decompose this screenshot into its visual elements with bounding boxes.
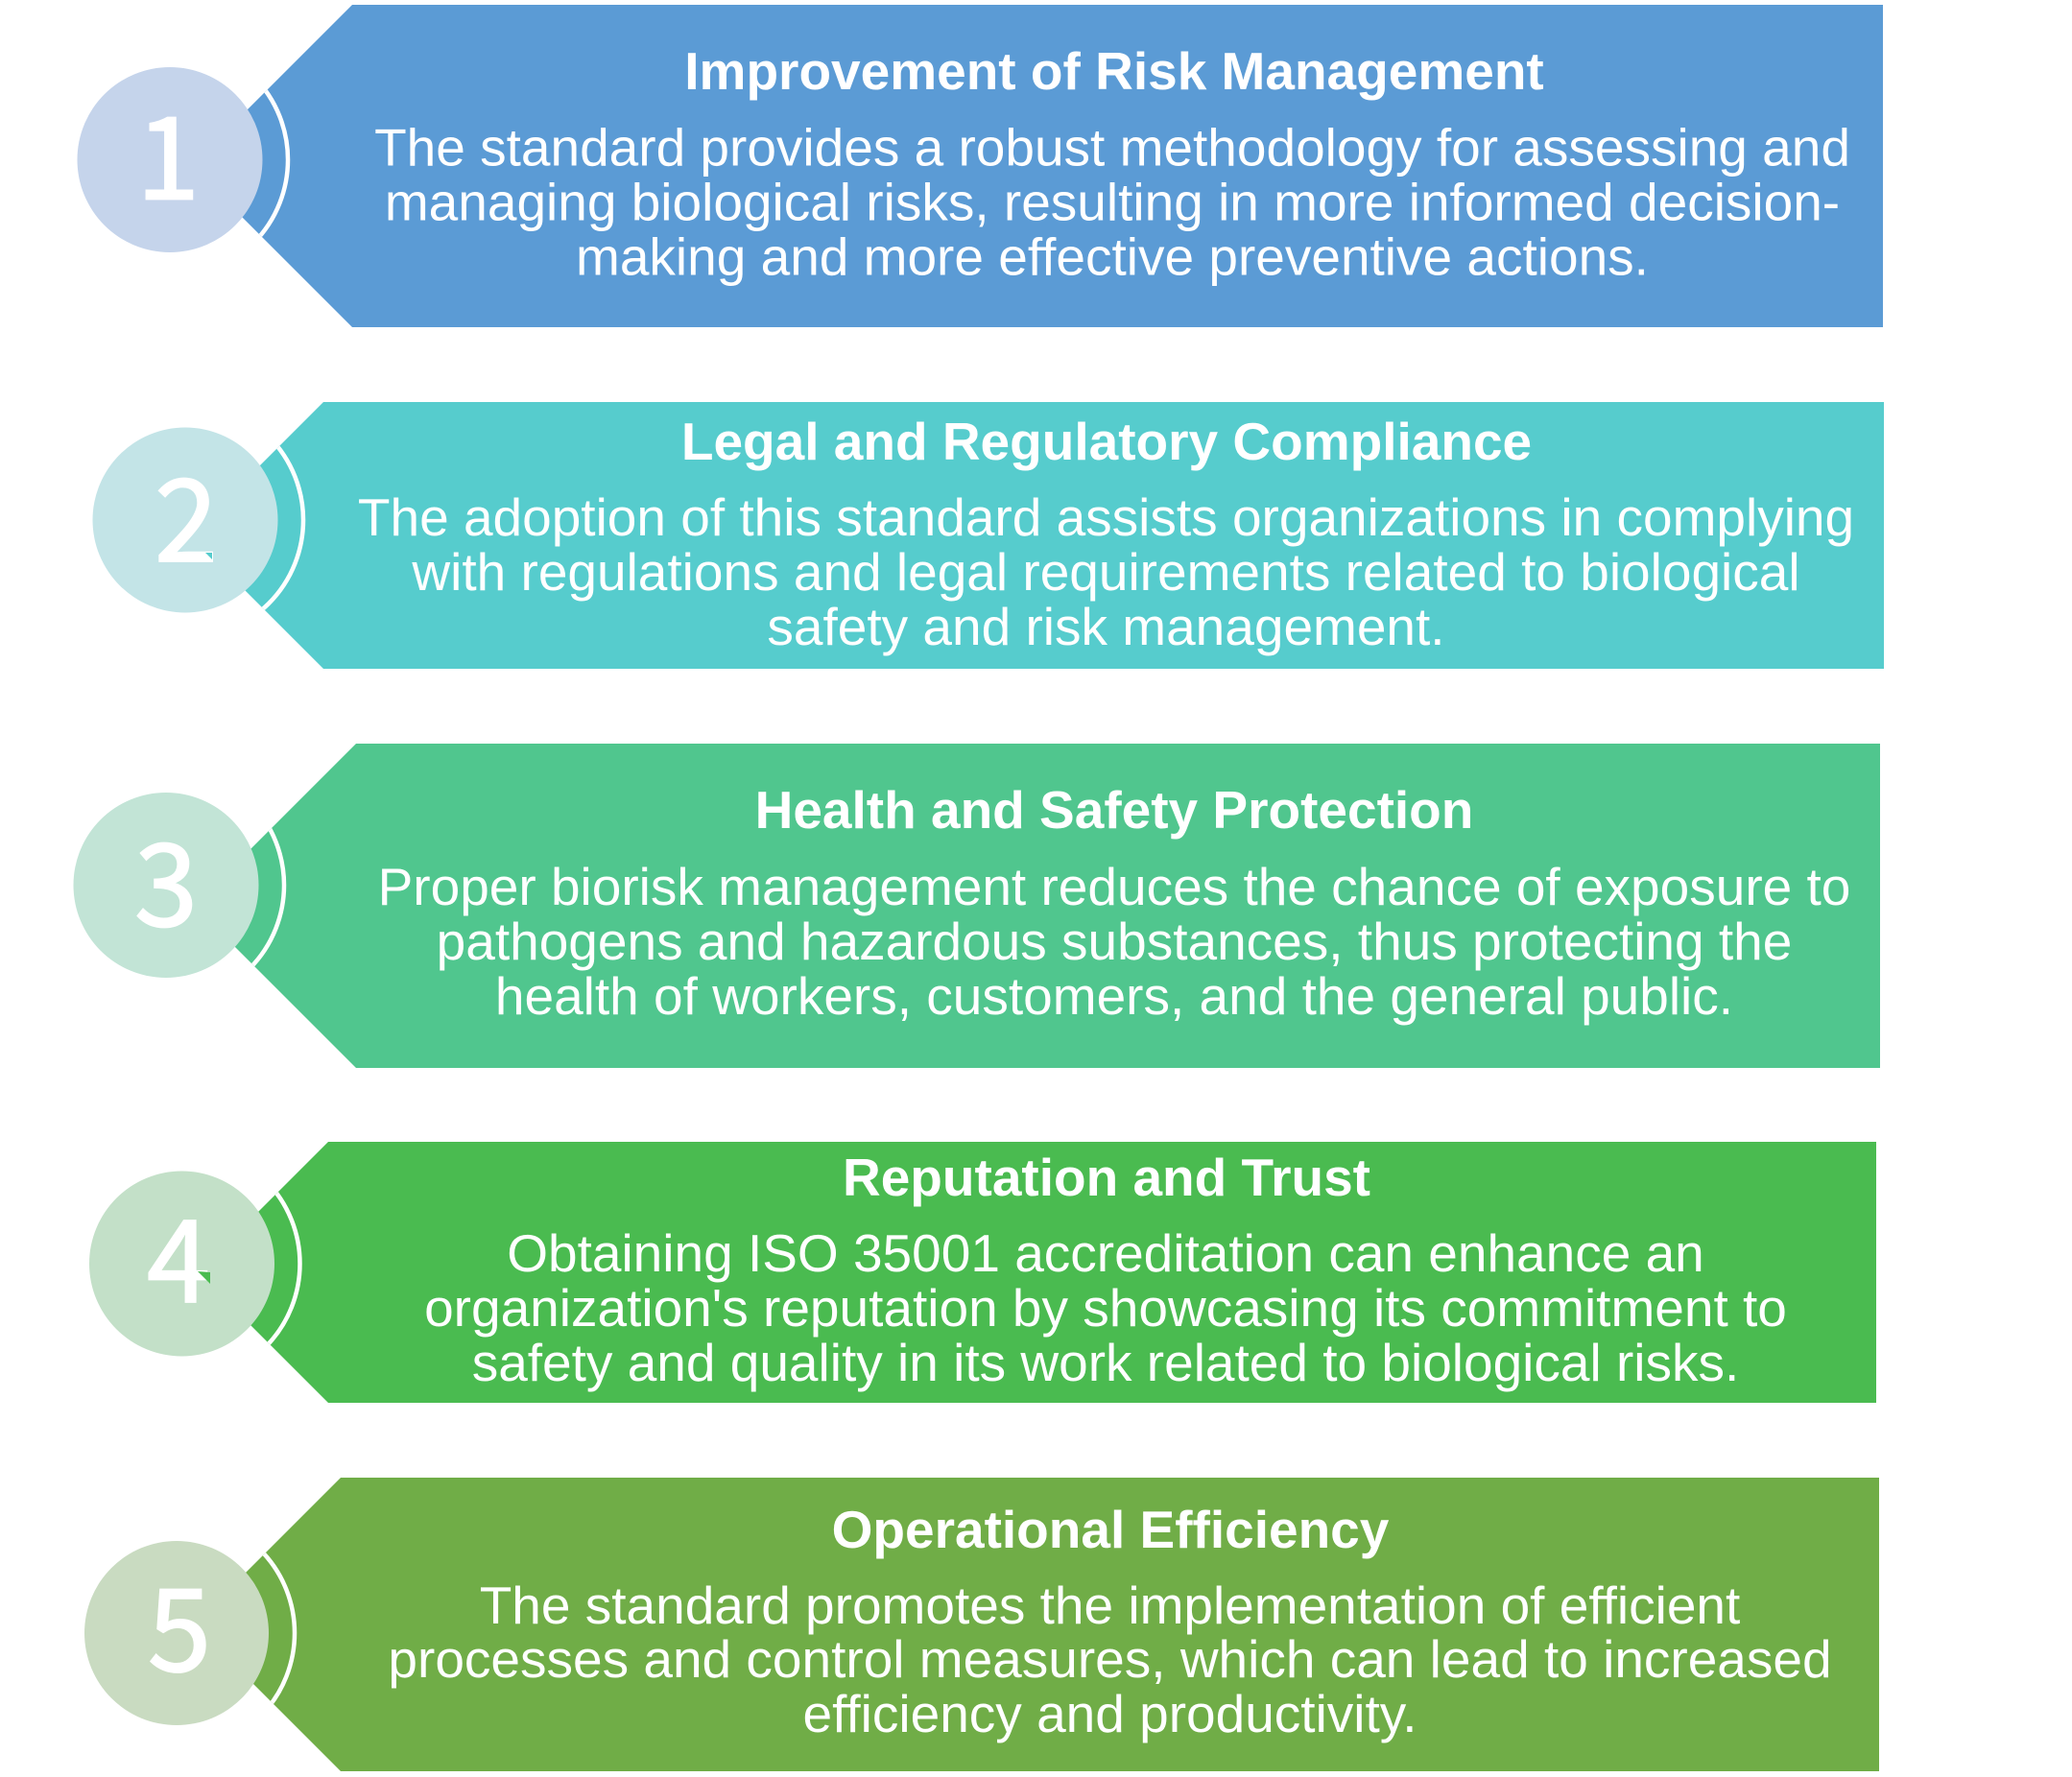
panel 2 white arc — [261, 445, 305, 610]
panel 1 heading: Improvement of Risk Management — [684, 41, 1544, 101]
panel 3 body text: Proper biorisk management reduces the chance of exposure to — [378, 857, 1850, 916]
panel 3 body text: health of workers, customers, and the general public. — [495, 966, 1733, 1026]
panel 5 heading: Operational Efficiency — [832, 1500, 1390, 1559]
panel 3 white arc — [251, 828, 286, 967]
panel 3 background arrow — [194, 744, 1880, 1068]
panel 2 body text: with regulations and legal requirements related to biological — [411, 542, 1800, 602]
panel 5 body text: efficiency and productivity. — [803, 1684, 1417, 1743]
panel 2 body text: The adoption of this standard assists organizations in complying — [358, 487, 1854, 547]
panel 4: Reputation and Trust — [63, 1142, 1876, 1403]
panel 5 number badge: 5 — [148, 1539, 211, 1704]
panel 4 body text: organization's reputation by showcasing its commitment to — [424, 1278, 1787, 1338]
panel 1 number badge — [77, 67, 263, 252]
panel 5: Operational Efficiency — [59, 1478, 1879, 1771]
panel 3 body text — [378, 857, 1850, 1026]
panel 1 body text: managing biological risks, resulting in more informed decision- — [385, 173, 1840, 232]
panel 5 number badge — [84, 1539, 269, 1725]
panel 1 background arrow — [191, 5, 1883, 327]
panel 5 background arrow — [194, 1478, 1879, 1771]
panel 3 body text: pathogens and hazardous substances, thus protecting the — [437, 912, 1792, 971]
panel 2 number badge: 2 — [155, 430, 218, 595]
panel 5 body text — [388, 1576, 1832, 1743]
panel 2 number badge — [92, 428, 278, 612]
panel 1 body text: The standard provides a robust methodology for assessing and — [374, 117, 1850, 177]
panel 4 body text: safety and quality in its work related to biological risks. — [472, 1333, 1739, 1392]
panel 4 body text — [424, 1223, 1787, 1392]
panel 3 number badge — [73, 793, 259, 978]
panel 1 body text: making and more effective preventive actions. — [576, 226, 1649, 286]
panel 4 number badge — [89, 1171, 274, 1357]
panel 4 heading: Reputation and Trust — [843, 1148, 1370, 1207]
panel 4 body text: Obtaining ISO 35001 accreditation can enhance an — [507, 1223, 1704, 1283]
panel 1 body text — [374, 117, 1850, 286]
panel 4 background arrow — [198, 1142, 1876, 1403]
panel 3 heading: Health and Safety Protection — [755, 780, 1473, 840]
panel 2 heading: Legal and Regulatory Compliance — [681, 412, 1532, 471]
panel 4 number badge: 4 — [147, 1171, 210, 1336]
panel 2 body text — [358, 487, 1854, 656]
panel 4 white arc — [267, 1192, 302, 1345]
panel 1: Improvement of Risk Management — [52, 5, 1883, 327]
panel 5 white arc — [263, 1552, 298, 1704]
panel 3: Health and Safety Protection — [48, 744, 1880, 1068]
panel 2 body text: safety and risk management. — [767, 597, 1445, 656]
panel 5 body text: The standard promotes the implementation of efficient — [480, 1576, 1740, 1635]
panel 1 white arc — [259, 89, 290, 237]
panel 3 number badge: 3 — [134, 794, 198, 960]
panel 2 background arrow — [190, 402, 1884, 669]
panel 5 body text: processes and control measures, which can lead to increased — [388, 1629, 1832, 1689]
panel 1 number badge: 1 — [136, 67, 200, 232]
panel 2: Legal and Regulatory Compliance — [67, 402, 1884, 669]
